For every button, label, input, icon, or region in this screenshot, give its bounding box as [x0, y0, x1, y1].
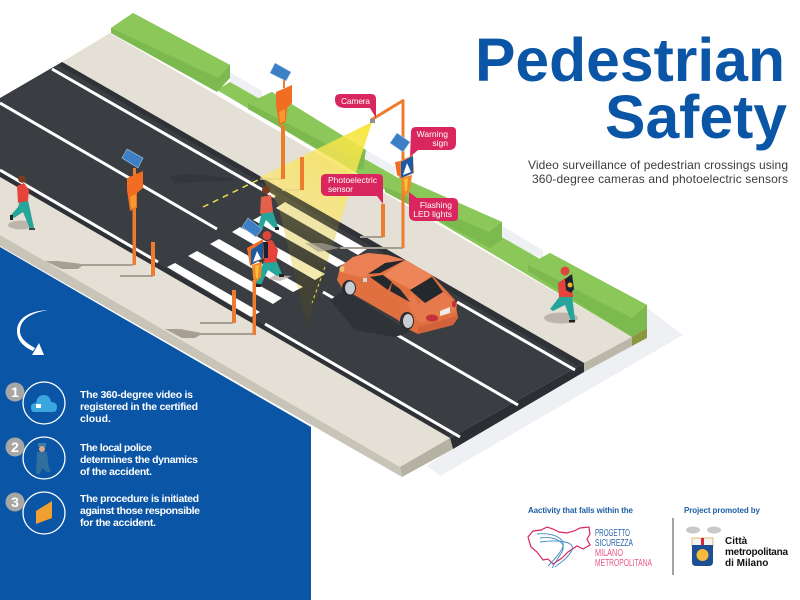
callout: flashing LED lights [409, 192, 458, 221]
car hood [340, 253, 405, 278]
hedge 3 [385, 177, 502, 248]
icon: folder [23, 492, 65, 534]
car lights and plate [340, 266, 456, 322]
green verge [217, 82, 647, 337]
road far kerb [58, 62, 584, 366]
badge 3: 3 [11, 494, 19, 510]
road surface [0, 62, 584, 438]
car roof [383, 260, 432, 290]
step 1 [6, 382, 198, 425]
callout: camera [335, 94, 376, 118]
near sidewalk end face [400, 438, 453, 477]
lane markings [0, 69, 575, 437]
logo: Città metropolitana di Milano [686, 526, 788, 569]
logo: Città metropolitana di Milano: metropolitana [725, 547, 788, 558]
far sidewalk [62, 33, 632, 363]
cone tint on stripes [262, 178, 340, 327]
footer divider [672, 518, 674, 575]
hedge 2 [248, 92, 366, 170]
callout: camera: Camera [341, 96, 370, 106]
road near kerb [0, 172, 450, 438]
road front face [450, 363, 584, 449]
step 3 text: The procedure is initiated [80, 493, 199, 505]
camera light cone [260, 122, 372, 327]
car windows [368, 260, 443, 303]
pedestrian: crossing near [256, 231, 292, 287]
subtitle: 360-degree cameras and photoelectric sensors [532, 172, 788, 186]
car bumper [418, 316, 458, 334]
cone edge dashes [312, 267, 325, 303]
pole ground shadows [45, 178, 403, 338]
footer heading: activity: Aactivity that falls within the [528, 506, 634, 515]
step 2 text: determines the dynamics [80, 454, 198, 466]
far sidewalk end face [584, 337, 632, 372]
icon: police officer [23, 437, 65, 479]
step 3 [6, 492, 200, 534]
logo: Progetto Sicurezza: PROGETTO [595, 528, 630, 539]
badge 1: 1 [11, 384, 19, 400]
car shadow [330, 290, 410, 337]
left sign assembly [122, 149, 155, 276]
callout: warning sign: Warning [417, 129, 448, 139]
step 1 text: registered in the certified [80, 401, 198, 413]
subtitle: Video surveillance of pedestrian crossings using [528, 158, 788, 172]
car wheels [342, 280, 414, 330]
front sign assembly [232, 218, 264, 335]
step 2 text: The local police [80, 442, 152, 454]
zebra crossing [167, 202, 367, 317]
step 3 text: for the accident. [80, 517, 156, 529]
callout: warning sign: sign [432, 138, 448, 148]
cone glow on road [262, 178, 340, 327]
subtitle [528, 158, 788, 186]
icon: cloud [23, 382, 65, 424]
callout: photoelectric sensor [321, 174, 383, 204]
pedestrian: right sidewalk [544, 266, 578, 324]
near sidewalk [0, 177, 450, 467]
step 1 text: The 360-degree video is [80, 389, 193, 401]
badge 1 [6, 382, 24, 402]
car body [337, 253, 458, 334]
badge 2 [6, 438, 24, 456]
logo: Progetto Sicurezza: METROPOLITANA [595, 558, 652, 569]
step 2 text: of the accident. [80, 466, 152, 478]
badge 2: 2 [11, 439, 19, 455]
callout: photoelectric sensor: Photoelectric [328, 175, 378, 185]
car [330, 253, 458, 337]
street scene base [0, 13, 647, 477]
callout: flashing LED lights: Flashing [420, 200, 452, 210]
far sign assembly [270, 63, 304, 190]
icon: curved arrow [17, 310, 48, 355]
car trunk [407, 291, 457, 323]
dashed sensor line [203, 180, 258, 207]
logo: Progetto Sicurezza: MILANO [595, 548, 623, 559]
pedestrian: crossing far [258, 186, 279, 230]
crossing shadow [305, 243, 340, 252]
step 3 text: against those responsible [80, 505, 200, 517]
callout: flashing LED lights: LED lights [413, 209, 452, 219]
callout: warning sign [410, 127, 456, 157]
logo: Progetto Sicurezza: SICUREZZA [595, 538, 633, 549]
near sidewalk long edge [0, 235, 402, 477]
logo: Città metropolitana di Milano: Città [725, 536, 748, 547]
step 2 [6, 437, 198, 479]
logo: Città metropolitana di Milano: di Milano [725, 558, 768, 569]
title: Safety [605, 83, 787, 151]
ground shadow [230, 72, 683, 476]
cone over sidewalk [260, 122, 372, 222]
callout: photoelectric sensor: sensor [328, 184, 353, 194]
badge 3 [6, 492, 24, 512]
logo: Progetto Sicurezza [528, 527, 652, 569]
blue panel [0, 247, 311, 600]
hedge 1 [111, 13, 230, 92]
title: Pedestrian [475, 26, 785, 94]
footer heading: promoted: Project promoted by [684, 506, 761, 515]
title [475, 26, 787, 151]
hedge 4 [528, 253, 647, 346]
step 1 text: cloud. [80, 413, 111, 425]
pedestrian: left [8, 175, 35, 230]
road shadow smudge [170, 174, 233, 184]
gantry with camera and warning sign [370, 100, 414, 248]
